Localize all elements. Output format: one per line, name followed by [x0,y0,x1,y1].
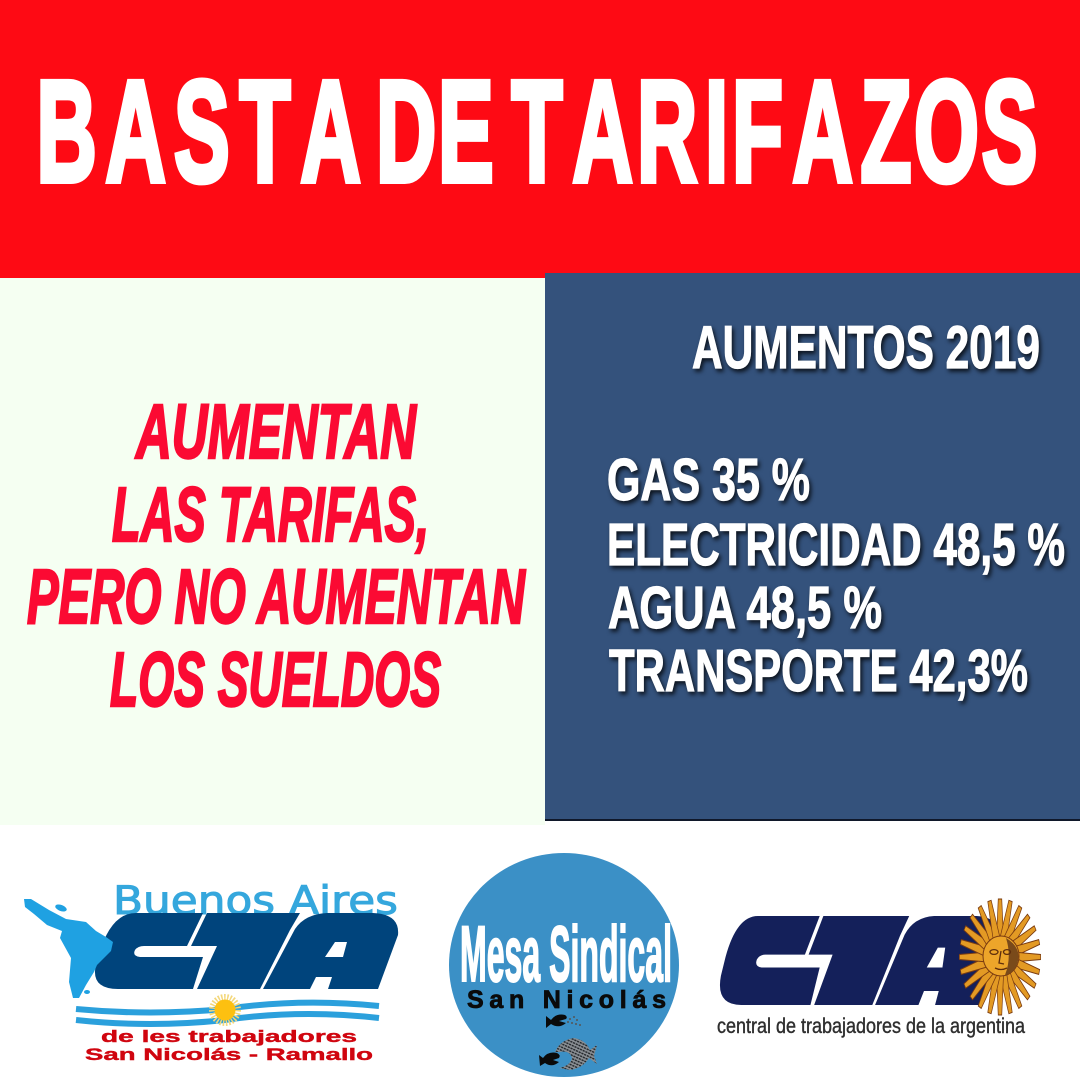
logo text: de les trabajadores: de les trabajadores [101,1027,357,1046]
panel: slogan [0,278,545,825]
list of increases: AGUA 48,5 % [608,575,882,641]
slogan text: LOS SUELDOS [110,637,441,723]
logo text: central de trabajadores de la argentina: central de trabajadores de la argentina [717,1015,1025,1038]
icon: small fish and school [546,1015,581,1028]
text: Mesa Sindical [460,909,672,998]
logo text: de les trabajadores: San Nicolás - Ramallo [85,1045,373,1064]
list of increases: GAS 35 % [607,447,810,513]
icon: flag bands [76,1003,379,1024]
title: BASTA DE TARIFAZOS [36,50,1037,212]
panel: aumentos 2019 [545,273,1080,821]
logo: CTA Argentina [717,899,1041,1038]
logo wordmark: Buenos Aires: Buenos Aires [113,879,398,924]
slogan text: LAS TARIFAS, [112,472,429,558]
icon: big fish school chasing small fish [539,1038,597,1070]
slogan text: PERO NO AUMENTAN [27,554,526,640]
slogan text: AUMENTAN [135,389,417,475]
logo shape: CTA letters [720,916,1000,1005]
icon: map of South America [24,899,113,998]
icon: sun of May [959,899,1041,1015]
logo text: San Nicolás: San Nicolás [467,986,666,1014]
logo: CTA Buenos Aires [24,879,398,1064]
logo shape: CTA letters [95,913,398,989]
panel: red title banner [0,0,1080,278]
logo text: de les trabajadores [85,1027,373,1064]
slogan text [27,389,526,723]
list of increases [607,447,1065,704]
icon: small sun [212,997,238,1023]
logo: Mesa Sindical [449,853,679,1077]
